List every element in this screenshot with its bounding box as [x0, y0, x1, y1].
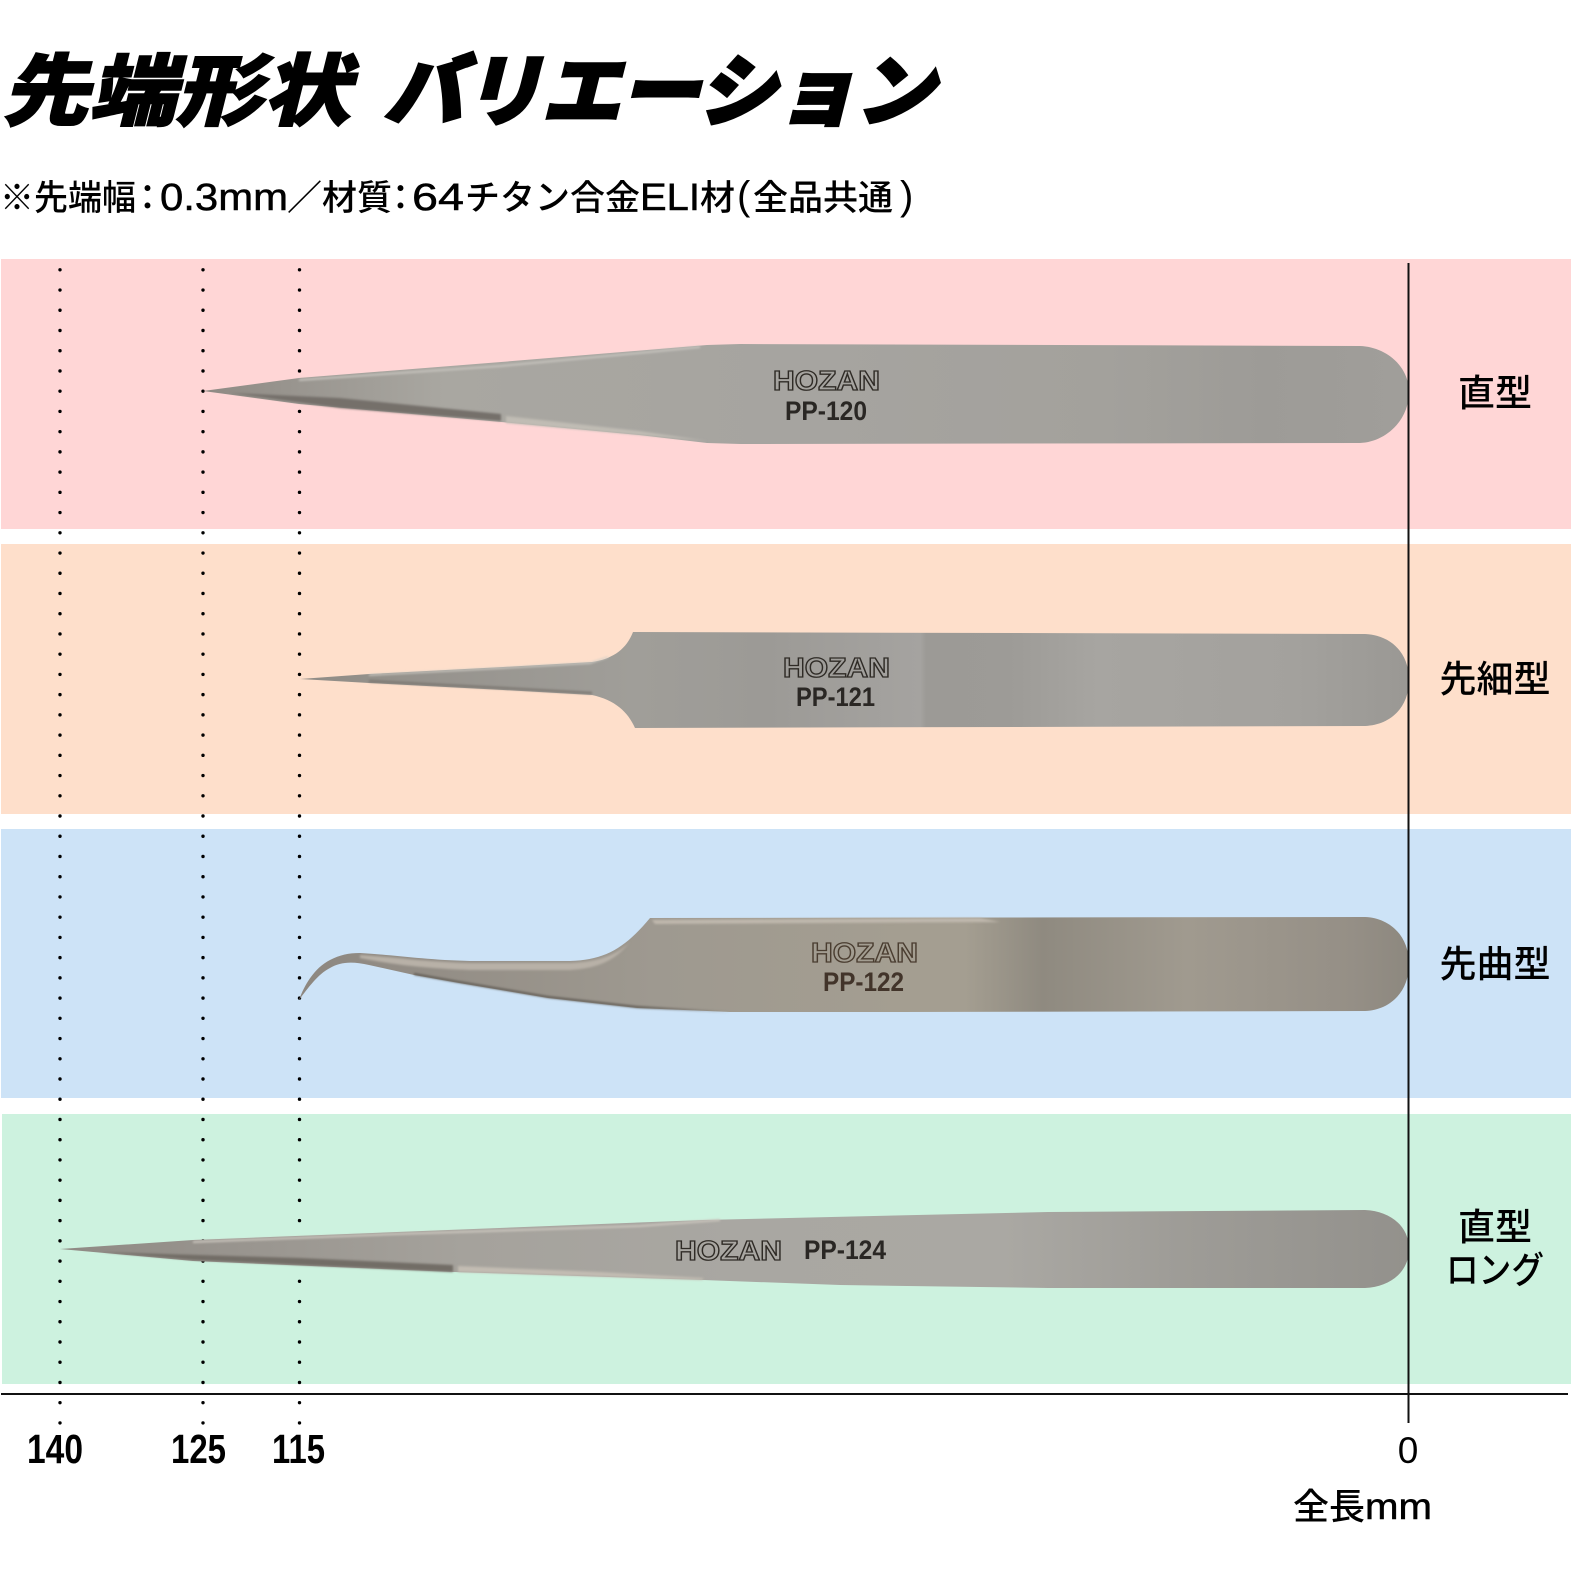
logo: HOZAN: HOZAN: [811, 937, 918, 968]
panel: curved tip type background: [1, 829, 1571, 1098]
subtitle: tip width and material note: ：: [130, 170, 165, 221]
subtitle: tip width and material note: (: [737, 174, 751, 218]
axis unit: total length mm: [1293, 1478, 1432, 1530]
subtitle: tip width and material note: ): [900, 174, 913, 218]
axis: zero line: [1408, 263, 1410, 1423]
label: fine tip type: 先細型: [1440, 649, 1550, 703]
axis value: 115: 115: [272, 1426, 325, 1472]
model number: PP-122: [823, 967, 904, 997]
axis: baseline: [1, 1393, 1568, 1395]
panel: straight type background: [1, 259, 1571, 529]
subtitle: tip width and material note: 材: [700, 170, 735, 221]
axis value: 140: 140: [27, 1426, 83, 1472]
axis value: 125: 125: [171, 1426, 226, 1472]
panel: fine tip type background: [1, 544, 1571, 814]
subtitle: tip width and material note: ：: [383, 170, 418, 221]
axis unit: total length mm: 全長: [1293, 1478, 1365, 1530]
tweezers: PP-122 curved tip: [299, 917, 1409, 1012]
tweezers: PP-124 long straight: [60, 1210, 1409, 1288]
axis value: 0: 0: [1398, 1430, 1418, 1471]
model number: PP-124: [804, 1235, 886, 1265]
title: 先端形状: [0, 28, 373, 142]
subtitle: tip width and material note: 64: [412, 177, 464, 219]
subtitle: tip width and material note: ELI: [640, 177, 700, 219]
logo: HOZAN: HOZAN: [783, 652, 890, 683]
panel: long straight type background: [2, 1114, 1571, 1384]
logo: HOZAN: HOZAN: [675, 1235, 782, 1266]
dotted guide lines at 140, 125, 115 mm: [60, 270, 300, 1425]
subtitle: tip width and material note: チタン合金: [465, 170, 640, 221]
subtitle: tip width and material note: ※先端幅: [0, 170, 136, 221]
model number: PP-121: [796, 682, 875, 712]
axis unit: total length mm: mm: [1365, 1486, 1432, 1527]
subtitle: tip width and material note: [0, 170, 913, 221]
title: [0, 28, 957, 142]
subtitle: tip width and material note: ／: [287, 170, 322, 221]
title: バリエーション: [378, 28, 957, 142]
subtitle: tip width and material note: 全品共通: [753, 170, 893, 221]
label: long straight type: ロング: [1446, 1240, 1544, 1294]
logo: HOZAN: HOZAN: [773, 365, 880, 396]
label: long straight type: 直型: [1458, 1197, 1532, 1251]
tweezers: PP-120 straight: [203, 344, 1409, 444]
label: long straight type: [1446, 1197, 1544, 1294]
label: straight type: 直型: [1458, 363, 1532, 417]
subtitle: tip width and material note: 材質: [322, 170, 392, 221]
label: curved tip type: 先曲型: [1440, 934, 1550, 988]
model number: PP-120: [785, 396, 867, 426]
subtitle: tip width and material note: 0.3mm: [160, 177, 288, 219]
tweezers: PP-121 fine tip: [300, 632, 1409, 728]
